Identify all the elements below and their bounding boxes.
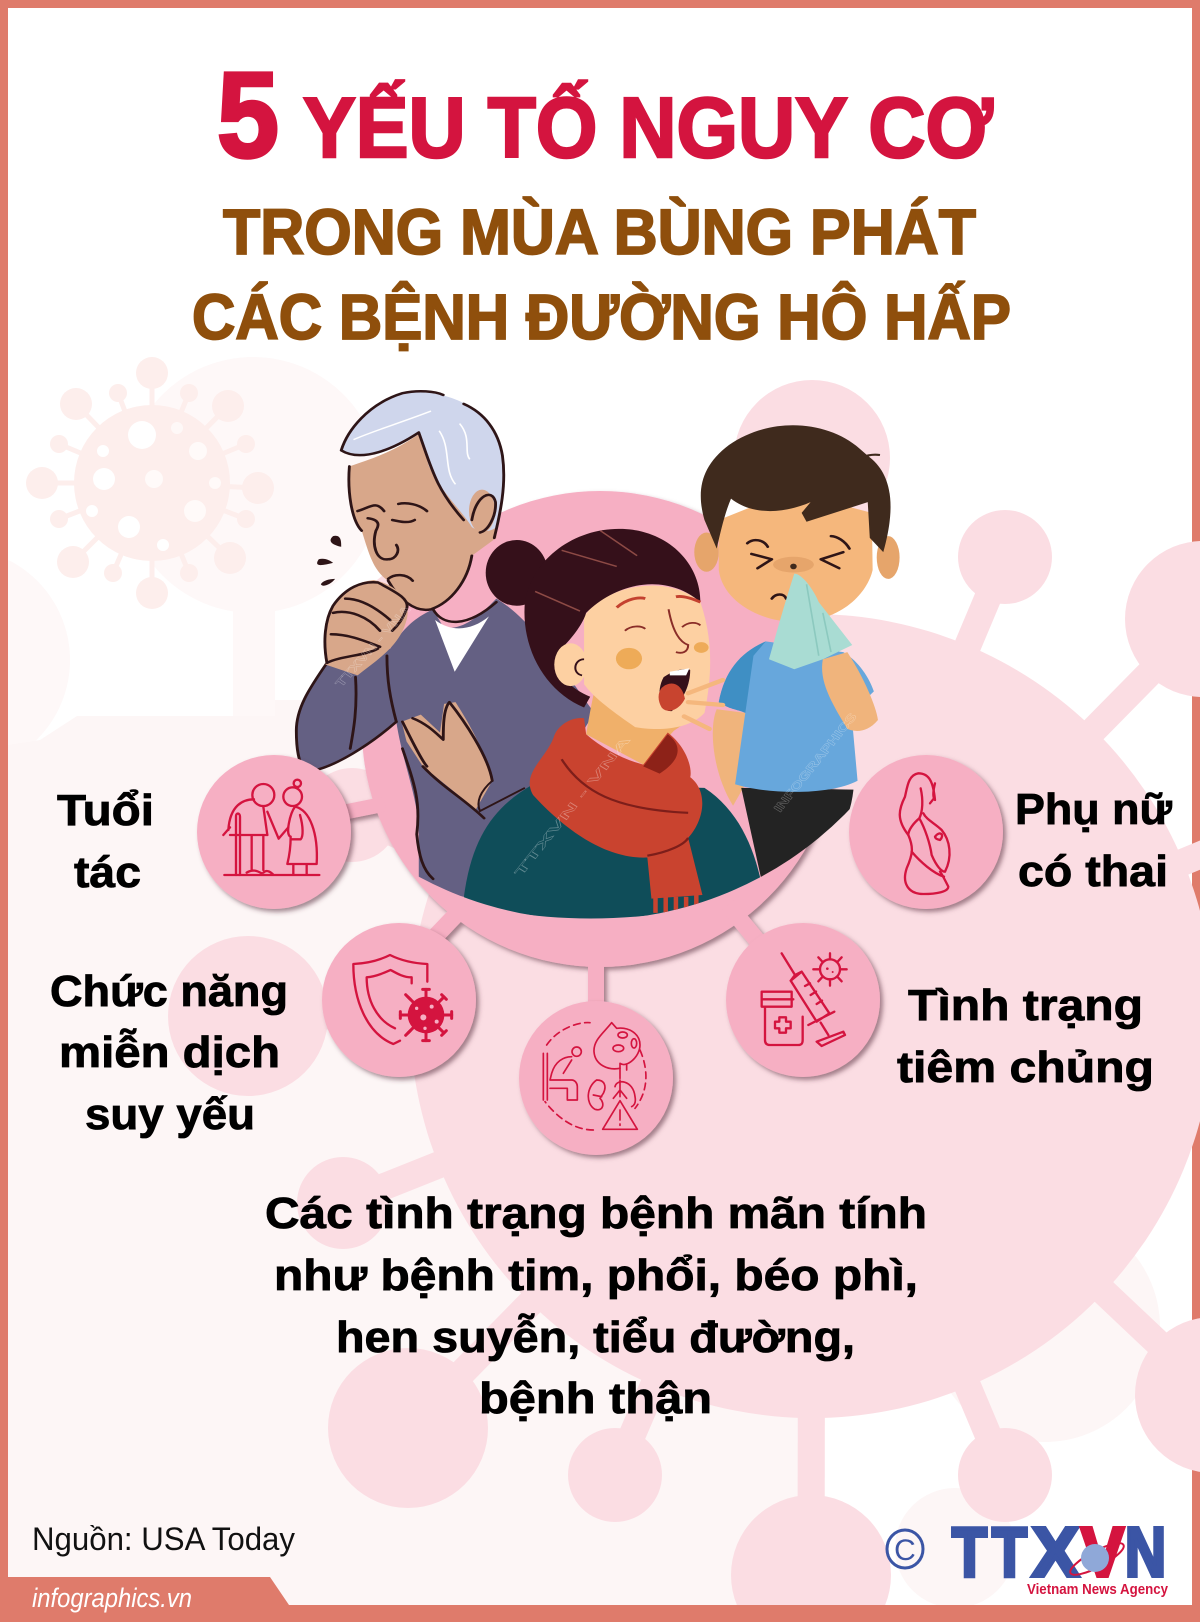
watermarks: TTXVN - VNA	[334, 604, 414, 690]
title: CÁC BỆNH ĐƯỜNG HÔ HẤP	[192, 280, 1011, 353]
label: vaccination status: tiêm chủng	[897, 1043, 1154, 1092]
title: YẾU TỐ NGUY CƠ	[303, 80, 993, 176]
illustration: three sick people	[296, 391, 900, 918]
figure: older man coughing	[296, 391, 594, 906]
icon: pregnant woman	[900, 773, 950, 894]
watermarks	[334, 604, 860, 879]
background: small virus top left	[26, 357, 274, 609]
page border: left	[0, 0, 8, 1622]
logo: TTXVN	[952, 1513, 1169, 1598]
icon: shield with virus	[353, 955, 452, 1044]
title	[192, 47, 1011, 353]
label: chronic conditions: bệnh thận	[479, 1374, 712, 1423]
bottom band and ribbon	[0, 1577, 1200, 1622]
label: vaccination status: Tình trạng	[908, 981, 1143, 1030]
label: weakened immunity: Chức năng	[50, 967, 288, 1016]
icon circle: chronic conditions	[519, 1001, 673, 1155]
connectors and main pink circle	[345, 491, 838, 1010]
background: pale virus shapes	[0, 357, 1160, 1610]
title: 5	[217, 47, 279, 183]
label: pregnant women: Phụ nữ	[1015, 785, 1172, 834]
ribbon text: infographics.vn	[32, 1583, 192, 1613]
label: age: Tuổi	[57, 786, 154, 835]
label: chronic conditions: Các tình trạng bệnh mãn tính	[265, 1189, 927, 1238]
label: age: tác	[74, 848, 141, 897]
logo: TTXVN: X	[1032, 1513, 1079, 1591]
watermarks: TTXVN - VNA	[513, 735, 633, 879]
logo: TTXVN: T	[992, 1513, 1027, 1591]
logo: TTXVN: T	[952, 1513, 987, 1591]
logo: TTXVN: V	[1081, 1513, 1124, 1591]
label: weakened immunity: miễn dịch	[59, 1027, 280, 1077]
icon circle: immune function	[322, 923, 476, 1077]
title: TRONG MÙA BÙNG PHÁT	[223, 196, 976, 268]
icon: syringe, jar and virus	[762, 953, 847, 1046]
icon circle: age	[197, 755, 351, 909]
logo: TTXVN: Vietnam News Agency	[1027, 1581, 1169, 1598]
label: chronic conditions	[265, 1189, 927, 1423]
label: weakened immunity: suy yếu	[85, 1090, 255, 1139]
label: age	[57, 786, 154, 897]
label: pregnant women: có thai	[1018, 847, 1168, 896]
copyright symbol: C	[894, 1534, 916, 1567]
icon: chronic conditions	[543, 1023, 646, 1130]
figure: woman coughing with scarf	[464, 529, 762, 918]
logo: TTXVN: N	[1125, 1513, 1166, 1591]
icon: elderly couple	[223, 780, 319, 875]
label: chronic conditions: như bệnh tim, phổi, béo phì,	[274, 1251, 918, 1300]
label: pregnant women	[1015, 785, 1172, 896]
label: vaccination status	[897, 981, 1154, 1092]
background: large pink virus	[168, 380, 1200, 1622]
copyright symbol	[887, 1530, 923, 1568]
icon circle: pregnant women	[849, 755, 1003, 909]
label: chronic conditions: hen suyễn, tiểu đường,	[336, 1312, 855, 1362]
icon circle: vaccination	[726, 923, 880, 1077]
figure: boy with tissue	[694, 425, 900, 881]
source: Nguồn: USA Today	[32, 1521, 295, 1557]
watermarks: INFOGRAPHICS	[772, 711, 860, 814]
label: weakened immunity	[50, 967, 288, 1139]
